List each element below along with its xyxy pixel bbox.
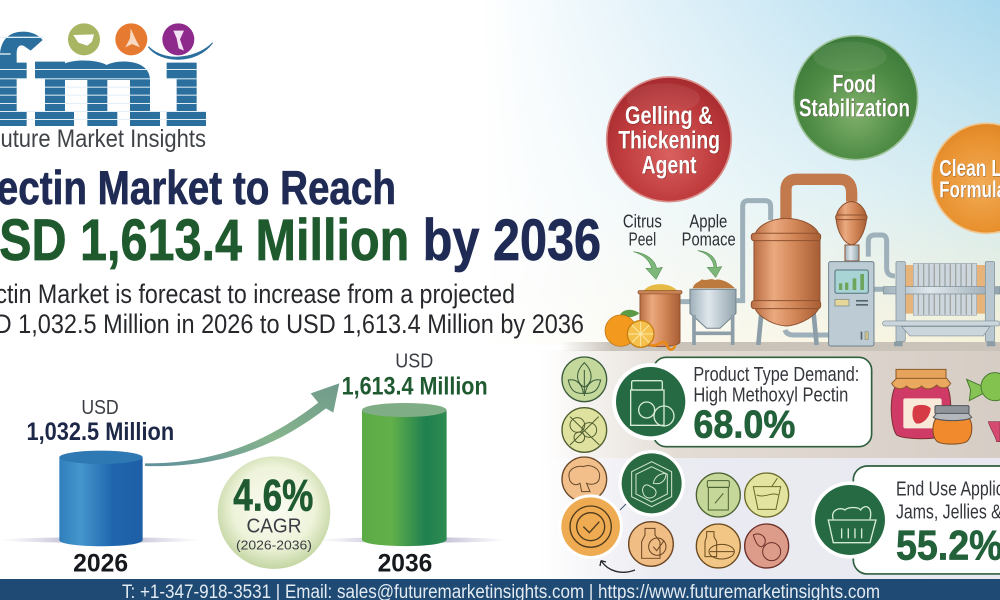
label: 2036 year: 2036 xyxy=(378,550,432,578)
icon: yogurt xyxy=(745,473,789,517)
icon: fruit xyxy=(745,524,789,568)
bubble: gelling and thickening agent: Gelling & xyxy=(625,102,713,130)
icon: bottle check xyxy=(629,522,673,566)
bubble: food stabilization: Food xyxy=(833,72,876,99)
card: product type demand: Product Type Demand: xyxy=(693,364,859,386)
logo letters xyxy=(0,32,206,126)
icon: cauliflower xyxy=(562,457,607,502)
icon: strawberry jam jar xyxy=(891,369,951,439)
growth arrow xyxy=(145,383,339,466)
icon: no additives xyxy=(562,408,607,452)
label: 2036 value: USD xyxy=(395,350,433,372)
label: 2036 value: 1,613.4 Million xyxy=(342,372,488,400)
connector arrow xyxy=(600,561,635,572)
control panel xyxy=(829,262,874,346)
filter press xyxy=(883,262,1000,346)
lower panel icons and cards xyxy=(558,357,1000,574)
CAGR badge xyxy=(218,456,330,569)
label: apple pomace: Pomace xyxy=(682,229,736,250)
icon: basket xyxy=(811,481,889,559)
bar chart: market growth xyxy=(0,350,507,578)
label: apple pomace: Apple xyxy=(689,210,727,231)
bubble: food stabilization xyxy=(794,36,918,160)
citrus peel vat xyxy=(638,284,682,347)
card: product type demand xyxy=(612,357,872,447)
shadow: ground xyxy=(0,537,507,543)
card: end use application xyxy=(811,466,1000,574)
footer bar xyxy=(0,579,1000,600)
title xyxy=(0,161,601,273)
pipes xyxy=(680,201,897,335)
jam jars and sweets xyxy=(891,369,1000,444)
logo globe: americas xyxy=(68,23,100,55)
bar: 2036 xyxy=(362,403,447,546)
bubble: food stabilization: Stabilization xyxy=(799,96,910,123)
bubble: gelling and thickening agent: Agent xyxy=(642,151,697,179)
label: 2026 value: USD xyxy=(81,397,119,419)
process illustration xyxy=(605,36,1000,350)
icon: bakery and bottle xyxy=(696,524,740,568)
logo: fmi xyxy=(0,23,213,126)
icon: natural hexagon xyxy=(618,450,685,517)
label: citrus peel: Citrus xyxy=(623,210,662,231)
label: apple pomace xyxy=(682,210,736,250)
CAGR badge: 4.6% xyxy=(233,472,313,521)
logo globe: world xyxy=(162,23,194,55)
bubble: gelling and thickening agent xyxy=(607,77,731,202)
bubble: gelling and thickening agent: Thickening xyxy=(618,126,720,154)
description xyxy=(0,279,584,339)
label: 2026 value xyxy=(26,397,174,446)
bubble: clean label formulations xyxy=(932,123,1000,233)
label: citrus peel xyxy=(623,210,662,250)
arrow: pomace xyxy=(698,251,722,277)
icon: quality badge xyxy=(558,494,623,559)
bar: 2026 xyxy=(59,451,143,546)
logo stripes xyxy=(0,37,207,120)
apple pomace hopper xyxy=(690,279,736,345)
icon: jam jar xyxy=(612,363,689,440)
CAGR badge: (2026-2036) xyxy=(236,538,312,552)
label: 2036 value xyxy=(342,350,488,400)
card: product type demand: 68.0% xyxy=(693,402,795,446)
icon: leaf xyxy=(562,357,607,402)
icon: jam jar small xyxy=(696,473,740,517)
card: product type demand: High Methoxyl Pectin xyxy=(693,385,848,407)
icon: pink dessert xyxy=(988,422,1000,442)
logo globe: asia xyxy=(115,23,147,55)
copper vessel xyxy=(751,179,867,345)
oranges xyxy=(605,310,675,350)
label: 2026 value: 1,032.5 Million xyxy=(26,418,174,446)
label: 2026 year: 2026 xyxy=(73,550,128,578)
arrow: citrus xyxy=(633,252,662,279)
connector line xyxy=(620,504,626,510)
icon: green candy xyxy=(967,373,1000,401)
CAGR badge: CAGR xyxy=(246,516,301,538)
icon: orange jam jar xyxy=(933,406,972,444)
label: citrus peel: Peel xyxy=(628,229,656,250)
logo swoosh xyxy=(148,43,213,59)
